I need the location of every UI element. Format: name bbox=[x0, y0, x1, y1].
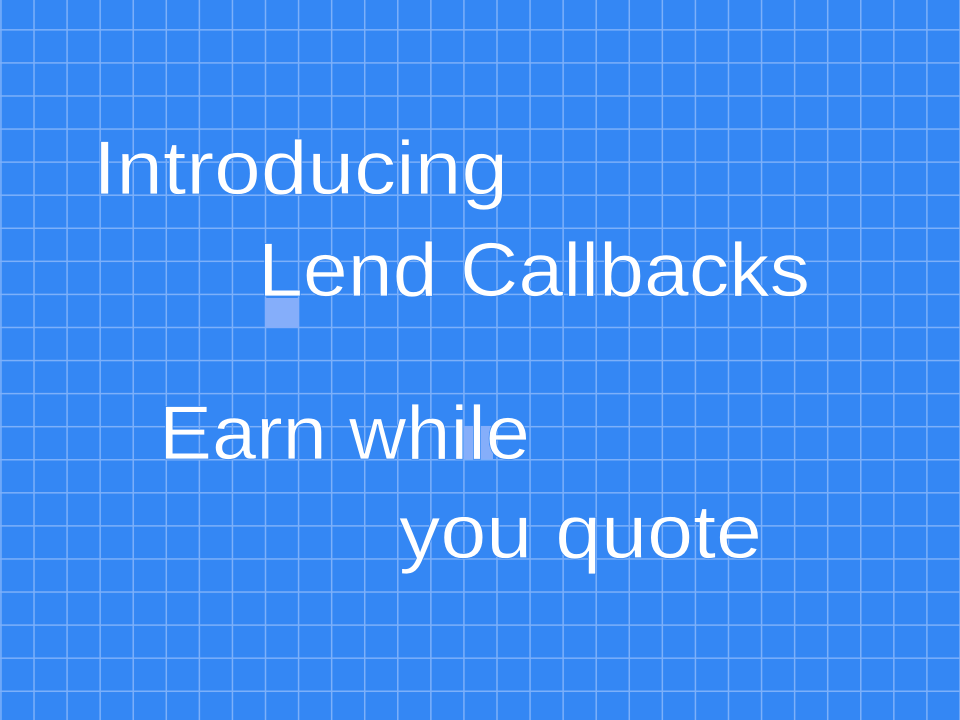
heading: Introducing: Introducing bbox=[93, 126, 508, 211]
tagline: you quote: you quote bbox=[399, 490, 762, 575]
tagline: Earn while: Earn while bbox=[159, 391, 530, 476]
highlighted grid cell under Lend bbox=[265, 298, 299, 328]
heading: Lend Callbacks: Lend Callbacks bbox=[258, 228, 810, 313]
highlighted grid cell under while bbox=[464, 426, 493, 459]
